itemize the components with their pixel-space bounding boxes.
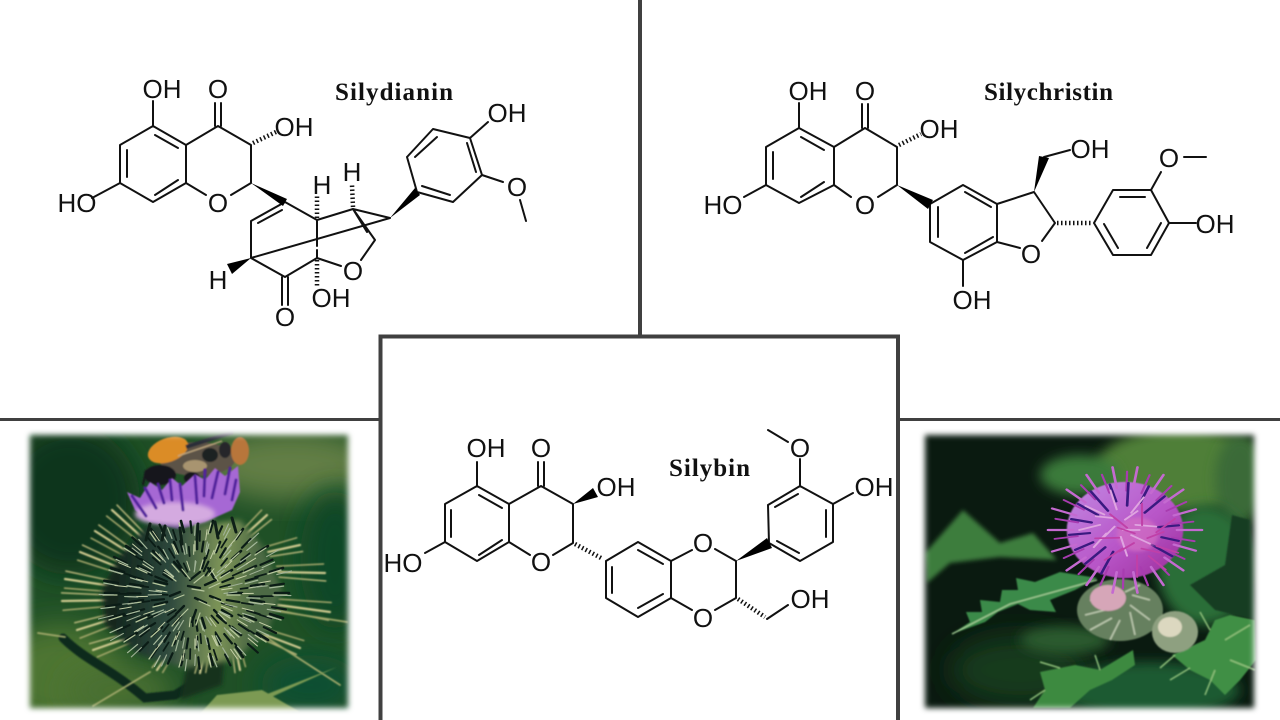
magenta flower [1046,466,1204,594]
atom labels: Silybin: O [790,433,810,463]
atom labels: Silydianin [58,74,527,332]
atom labels: Silydianin: OH [488,98,526,128]
bonds: Silydianin skeleton [92,101,526,305]
atom labels: Silybin: OH [790,584,830,614]
pale central strands [1078,490,1180,578]
atom labels: Silychristin: O [1159,143,1179,173]
panel: Silybin frame [380,336,898,720]
atom labels: Silychristin: OH [1196,209,1234,239]
lower leaf [203,668,334,712]
atom labels: Silybin: HO [384,548,422,578]
atom labels: Silychristin: O [855,76,875,106]
photo background: dark foliage [915,425,1265,718]
thistle head body [102,520,282,668]
bonds: Silychristin skeleton [744,103,1206,286]
atom labels: Silychristin: OH [788,76,828,106]
atom labels: Silybin: OH [854,472,894,502]
atom labels: Silydianin: H [209,265,227,295]
panel: Silybin structure [384,430,894,633]
divider: horizontal left [0,418,380,421]
wedge bonds: Silydianin [227,183,420,274]
atom labels: Silybin: O [531,547,551,577]
atom labels: Silychristin: O [1021,239,1041,269]
hashed bonds: Silydianin [253,131,353,286]
atom labels: Silydianin: OH [142,74,182,104]
atom labels: Silydianin: H [343,157,361,187]
photo: thistle with bumblebee [25,430,353,713]
flower head [1067,482,1183,578]
hashed bonds: Silychristin [899,134,1092,223]
outer florets [1046,466,1204,594]
pink centre [1117,517,1158,552]
atom labels: Silydianin: O [275,302,295,332]
stem [63,638,213,698]
purple tuft [127,466,240,530]
serrated leaf [952,572,1097,634]
divider: horizontal right [898,418,1280,421]
atom labels: Silydianin: O [208,188,228,218]
atom labels: Silydianin: O [343,256,363,286]
atom labels: Silychristin: OH [920,114,958,144]
atom labels: Silychristin [704,76,1234,315]
atom labels: Silybin: O [693,528,713,558]
thistle bract spines [98,516,292,672]
atom labels: Silybin: O [531,433,551,463]
atom labels: Silybin: OH [466,433,506,463]
dark right leaf [1190,515,1256,620]
blurred left leaf [925,510,1057,583]
atom labels: Silychristin: O [855,190,875,220]
atom labels: Silydianin: OH [312,283,350,313]
divider: vertical top [638,0,642,336]
atom labels: Silybin: OH [596,472,636,502]
atom labels: Silydianin: O [507,172,527,202]
atom labels: Silydianin: O [208,74,228,104]
atom labels: Silychristin: OH [1070,134,1110,164]
atom labels: Silydianin: HO [58,188,96,218]
thistle outer spines [38,501,347,706]
atom labels: Silydianin: H [313,170,331,200]
hashed bonds: Silybin [575,544,765,617]
buds [1077,579,1198,653]
wedge bonds: Silybin [573,488,772,561]
dark floret tips [1063,479,1184,576]
atom labels: Silybin: O [693,603,713,633]
atom labels: Silychristin: OH [952,285,992,315]
panel: Silychristin structure [704,76,1234,315]
bonds: Silybin skeleton [425,430,853,619]
panel: Silydianin structure [58,74,527,332]
title: Silychristin: Silychristin [984,79,1113,106]
wedge bonds: Silychristin [897,156,1049,209]
stem base [180,660,225,700]
title: Silydianin: Silydianin [335,79,453,106]
photo background: blurred green bokeh [25,430,353,713]
atom labels: Silychristin: HO [704,190,742,220]
atom labels: Silydianin: OH [274,112,314,142]
atom labels: Silybin [384,433,894,633]
bumblebee [143,432,249,485]
lower leaves [1030,612,1256,708]
title: Silybin: Silybin [669,455,750,482]
photo: milk thistle flower [915,425,1265,718]
